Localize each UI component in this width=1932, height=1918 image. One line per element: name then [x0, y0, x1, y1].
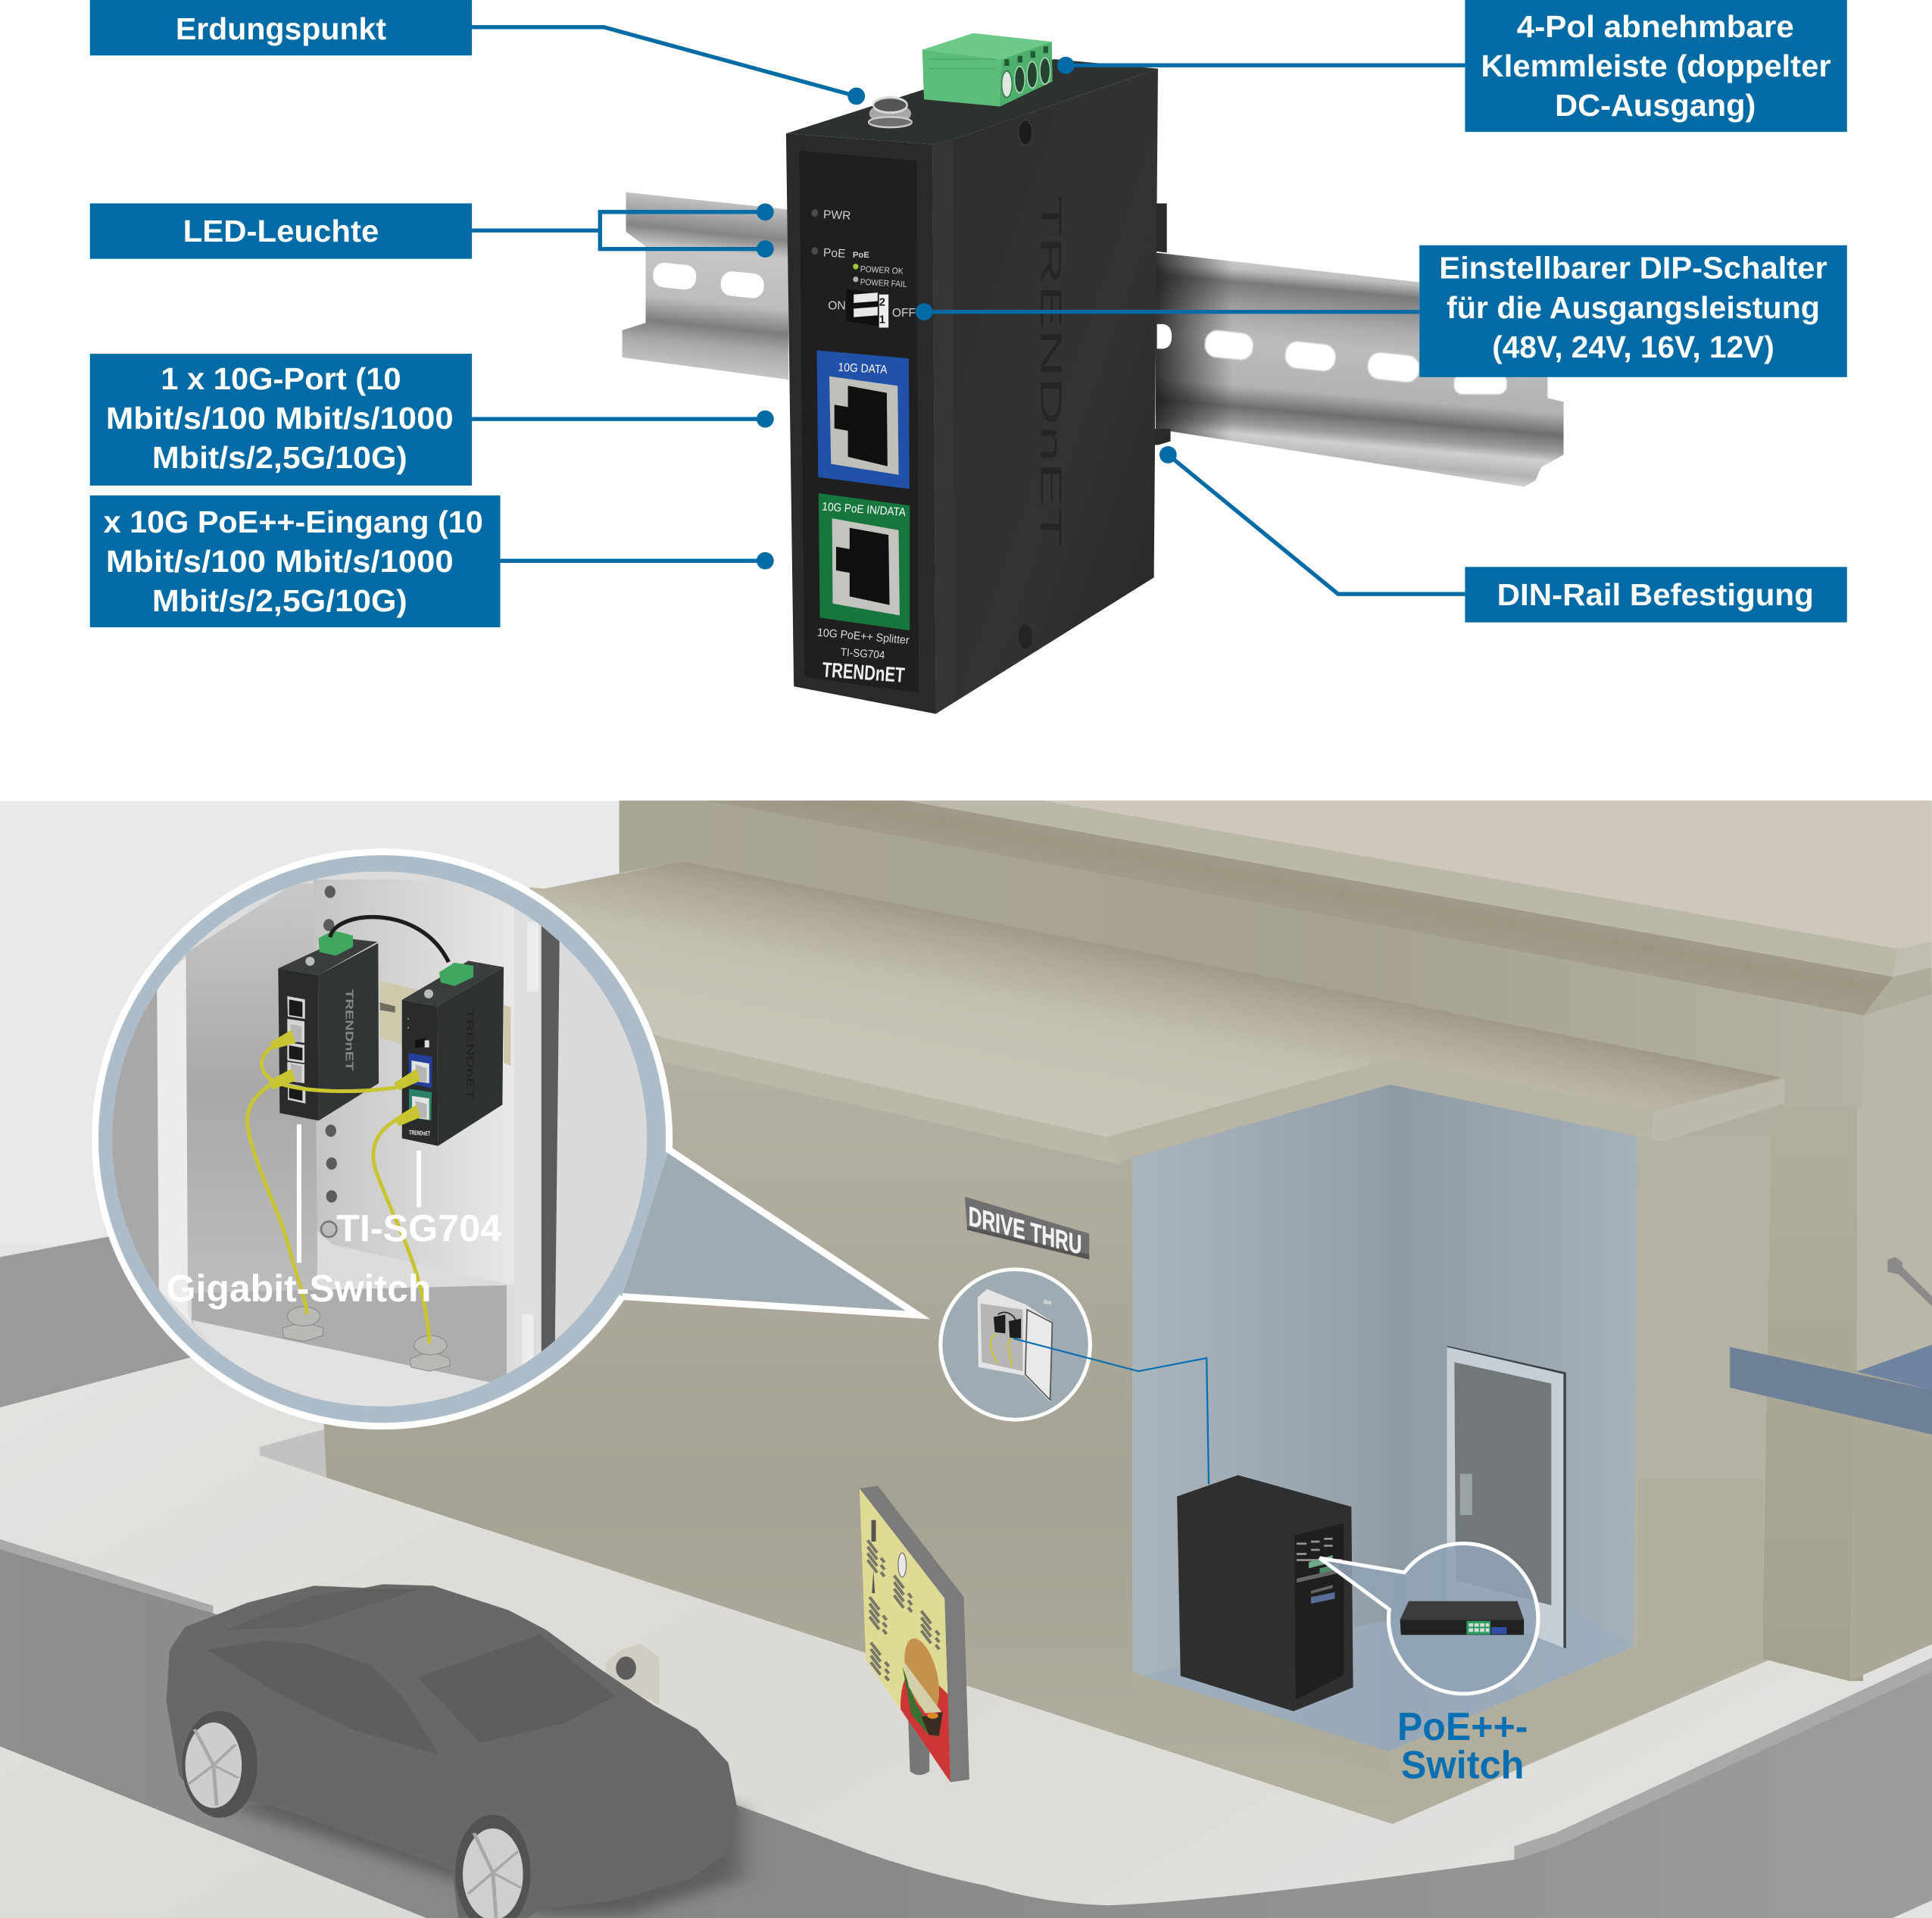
gigabit switch: [278, 930, 379, 1120]
board face: [860, 1488, 950, 1782]
callout: LED-Leuchte: LED-Leuchte: [183, 214, 379, 248]
callout: PoE input: [90, 495, 501, 627]
pointer lines: [299, 1124, 419, 1263]
callout: Erdungspunkt: [90, 0, 472, 55]
callout: 10G port: Mbit/s/100 Mbit/s/1000: [106, 401, 454, 436]
front wheel: [455, 1815, 531, 1918]
callout: DIP switch: [1419, 245, 1847, 377]
board edge: [860, 1486, 969, 1782]
TI-SG704 in enclosure: TRENDnET: [409, 1129, 430, 1137]
building wall: [323, 887, 1932, 1824]
label: PoE++ switch: Switch: [1401, 1744, 1524, 1788]
callout: terminal block: DC-Ausgang): [1555, 88, 1756, 123]
callout: terminal block: [1465, 0, 1847, 132]
device: TI-SG704 splitter: [786, 33, 1158, 714]
device front labels: 2: [879, 296, 885, 308]
callout: Erdungspunkt: Erdungspunkt: [176, 11, 386, 46]
device front labels: POWER OK: [860, 265, 904, 276]
burger: [898, 1635, 946, 1737]
PoE switch circle: [1319, 1544, 1538, 1694]
device front labels: [816, 208, 916, 687]
cable glands: [282, 1307, 450, 1371]
TI-SG704 in enclosure: [402, 961, 504, 1146]
device front labels: 10G DATA: [838, 361, 888, 376]
devices inside enclosure: [247, 917, 510, 1343]
callout disc: [96, 851, 670, 1426]
DIN rail: [623, 192, 1564, 487]
device shell: [786, 33, 1158, 714]
background road patch: [0, 1235, 197, 1407]
blue beam: [1730, 1345, 1932, 1435]
small enclosure circle: [941, 1270, 1090, 1420]
right wall sections: [1389, 982, 1932, 1824]
label: PoE++ switch: [1397, 1705, 1528, 1788]
mounting rail: [380, 981, 510, 1066]
red panel: [900, 1679, 950, 1782]
device front labels: 10G PoE++ Splitter: [816, 626, 910, 647]
callout: DIN rail: [1465, 567, 1847, 623]
right eave: [1390, 1060, 1785, 1142]
alcove floor: [1144, 1590, 1634, 1751]
gigabit switch: TRENDnET: [343, 989, 355, 1070]
hinges: [527, 922, 538, 992]
bollard: [606, 1644, 660, 1705]
rear wheel: [182, 1711, 257, 1818]
callout: terminal block: 4-Pol abnehmbare: [1517, 9, 1794, 44]
enclosure interior: [111, 872, 655, 1413]
side logo: TRENDnET: [1035, 196, 1067, 547]
callout: DIP switch: für die Ausgangsleistung: [1447, 290, 1820, 325]
yellow patch cables: [247, 1045, 429, 1343]
car: [167, 1584, 741, 1918]
callout dots: [757, 57, 1177, 570]
mounting plate holes: [323, 886, 337, 1203]
green terminal block: [922, 50, 1002, 107]
background ground: [0, 801, 1932, 1918]
callout: PoE input: x 10G PoE++-Eingang (10: [104, 504, 483, 539]
device front labels: ON: [828, 299, 846, 312]
device front labels: 1: [879, 314, 885, 326]
callout: LED-Leuchte: [90, 203, 472, 259]
TI-SG704 in enclosure: TRENDnET: [465, 1009, 476, 1100]
menu text bars: [868, 1540, 939, 1681]
device front labels: PWR: [823, 208, 851, 223]
bracket and rod: [1887, 1257, 1932, 1307]
device front labels: TRENDnET: [822, 658, 906, 687]
sign: drive thru: [965, 1197, 1089, 1260]
cable plugs: [269, 1024, 426, 1126]
label: TI-SG704: TI-SG704: [336, 1207, 502, 1249]
callout: PoE input: Mbit/s/100 Mbit/s/1000: [106, 544, 454, 579]
post: [908, 1720, 929, 1775]
callout: PoE input: Mbit/s/2,5G/10G): [152, 583, 407, 618]
street: [0, 1549, 1932, 1918]
callout: 10G port: 1 x 10G-Port (10: [161, 361, 401, 396]
car body: [167, 1584, 738, 1918]
network rack: [1177, 1475, 1353, 1711]
callout tail: [623, 1150, 918, 1315]
device front labels: PoE: [823, 246, 846, 261]
device front labels: PoE: [853, 251, 869, 260]
alcove lower sill: [1132, 1671, 1392, 1775]
network cable: [1013, 1339, 1209, 1484]
callout: 10G port: [90, 354, 472, 486]
device front labels: POWER FAIL: [860, 278, 907, 289]
callout: DIP switch: Einstellbarer DIP-Schalter: [1439, 251, 1827, 286]
label: Gigabit-Switch: Gigabit-Switch: [167, 1267, 431, 1310]
drive-thru alcove: [1132, 1085, 1637, 1751]
scene: building and drive-thru: [0, 801, 1932, 1918]
device front labels: 10G PoE IN/DATA: [822, 501, 907, 519]
callout lines: [472, 27, 1465, 594]
door, rack and switch callout: [941, 1270, 1566, 1711]
panel: product view: [623, 33, 1564, 714]
callout: 10G port: Mbit/s/2,5G/10G): [152, 440, 407, 475]
curb: [0, 1539, 1932, 1860]
callout outline: [95, 852, 918, 1426]
callout: DIN rail: DIN-Rail Befestigung: [1497, 577, 1814, 612]
plinth block: [260, 1429, 326, 1478]
car shadow: [226, 1760, 741, 1916]
roof: [534, 801, 1932, 1164]
callout: terminal block: Klemmleiste (doppelter: [1481, 48, 1831, 83]
door: [1447, 1346, 1566, 1648]
device front labels: OFF: [892, 307, 916, 320]
enlarged enclosure callout: [95, 851, 918, 1426]
power cable: [330, 917, 448, 962]
label: PoE++ switch: PoE++-: [1397, 1705, 1528, 1749]
sign: drive thru: DRIVE THRU: [969, 1201, 1081, 1260]
menu board: [860, 1486, 969, 1782]
callout: DIP switch: (48V, 24V, 16V, 12V): [1492, 330, 1774, 364]
device front labels: TI-SG704: [840, 647, 885, 662]
